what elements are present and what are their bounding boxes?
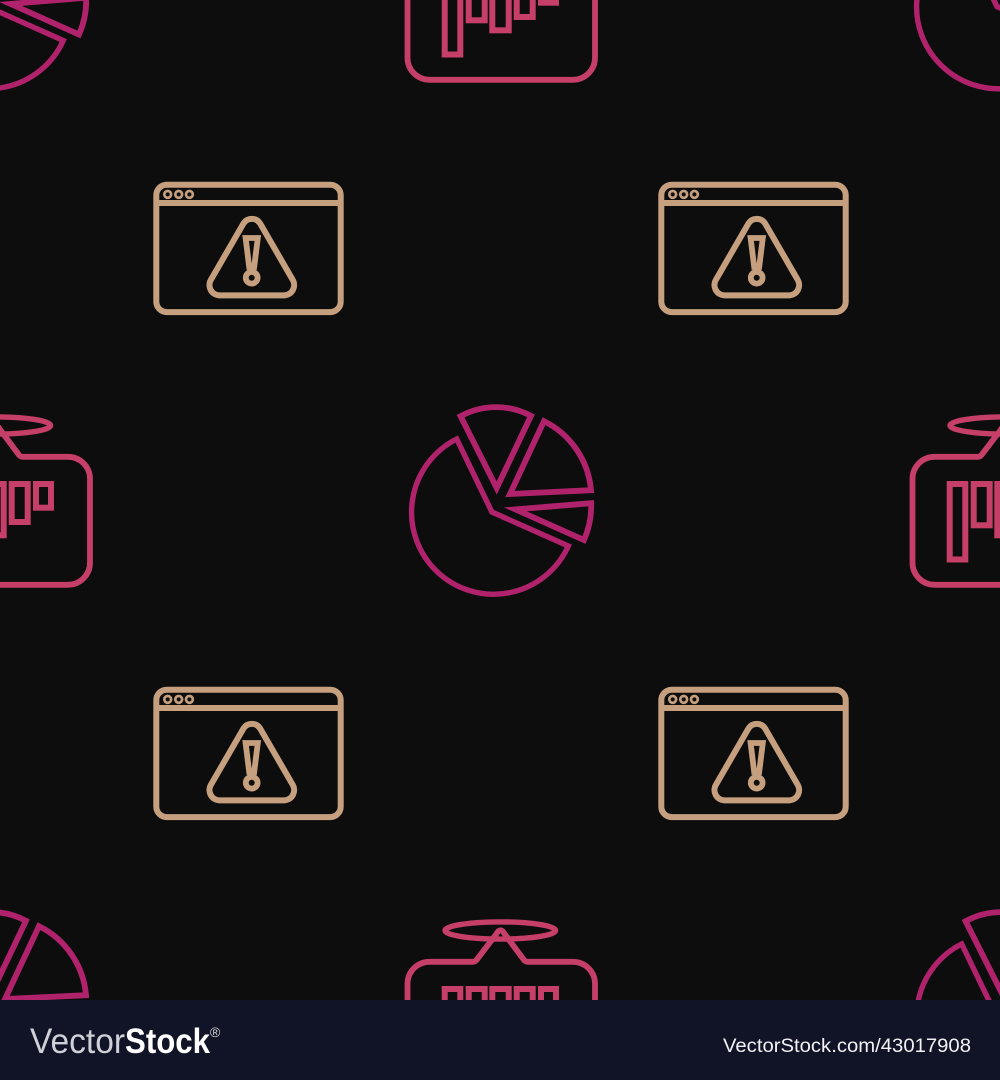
icon: browser warning window, upper right — [661, 185, 846, 312]
icon: pie chart, top right corner — [917, 0, 1000, 89]
logo: VectorStock wordmark — [30, 1022, 221, 1061]
icon: bar chart board, middle right — [912, 417, 1000, 585]
icon: bar chart board, middle left — [0, 417, 90, 585]
icon: pie chart, centre — [412, 407, 591, 594]
icon: pie chart, top left corner — [0, 0, 86, 89]
icon: browser warning window, lower left — [156, 690, 341, 817]
icon: browser warning window, lower right — [661, 690, 846, 817]
logo: VectorStock wordmark: Stock — [125, 1022, 210, 1061]
icon: bar chart board, top centre — [408, 0, 595, 80]
logo: VectorStock wordmark: ® — [210, 1024, 221, 1040]
icon: bar chart board, bottom centre — [408, 922, 595, 1080]
logo: VectorStock wordmark: Vector — [30, 1022, 125, 1061]
icon: pie chart, bottom left corner — [0, 912, 86, 1080]
image id link text: VectorStock.com/43017908 — [723, 1035, 971, 1057]
icon: pie chart, bottom right corner — [917, 912, 1000, 1080]
icon: browser warning window, upper left — [156, 185, 341, 312]
footer bar — [0, 1000, 1000, 1080]
